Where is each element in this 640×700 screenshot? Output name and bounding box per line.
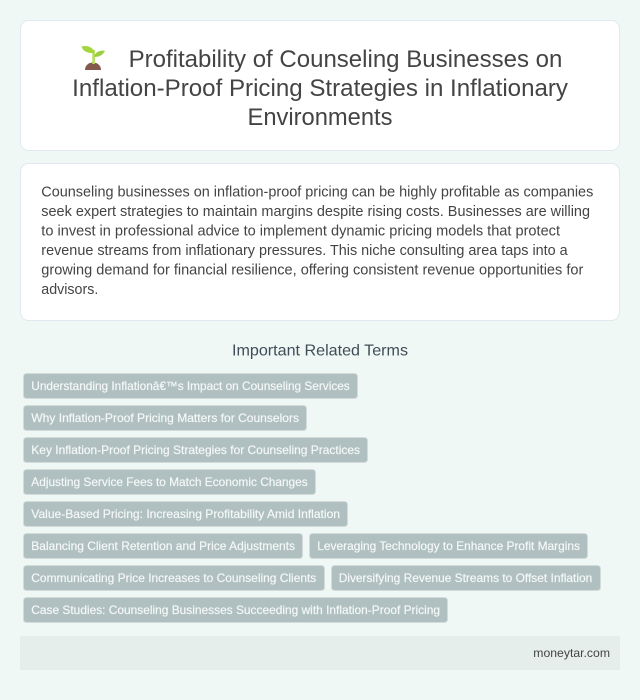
related terms tag list <box>24 374 600 622</box>
tag: balancing client retention: Balancing Client Retention and Price Adjustments <box>31 539 295 553</box>
tag: balancing client retention <box>24 534 302 558</box>
panel: summary paragraph: revenue streams from inflationary pressures. This niche consulting area taps into a <box>41 243 568 259</box>
panel: summary paragraph: Counseling businesses on inflation-proof pricing can be highly profitable as companies <box>41 185 593 201</box>
heading: title: Inflation-Proof Pricing Strategies in Inflationary <box>72 75 568 102</box>
tag: why pricing matters: Why Inflation-Proof Pricing Matters for Counselors <box>31 411 299 425</box>
tag: value-based pricing <box>24 502 348 526</box>
panel: summary paragraph: to invest in professional advice to implement dynamic pricing models that protect <box>41 224 560 240</box>
panel: summary paragraph: advisors. <box>41 282 98 298</box>
tag: communicating price increases <box>24 566 324 590</box>
footer: moneytar.com <box>533 646 610 660</box>
heading: title: Profitability of Counseling Businesses on <box>129 46 562 73</box>
heading: important related terms: Important Related Terms <box>232 342 408 360</box>
icon: seedling <box>82 46 105 70</box>
tag: why pricing matters <box>24 406 306 430</box>
tag: case studies: Case Studies: Counseling Businesses Succeeding with Inflation-Proof Pricing <box>31 603 440 617</box>
tag: case studies <box>24 598 448 622</box>
footer <box>20 636 620 670</box>
tag: key strategies <box>24 438 368 462</box>
tag: understanding inflation <box>24 374 358 398</box>
tag: leveraging technology <box>310 534 588 558</box>
heading: title <box>72 46 568 131</box>
panel: title card <box>20 20 620 150</box>
tag: communicating price increases: Communicating Price Increases to Counseling Clients <box>31 571 316 585</box>
panel: summary paragraph: growing demand for financial resilience, offering consistent revenue opportunities for <box>41 263 584 279</box>
tag: adjusting service fees: Adjusting Service Fees to Match Economic Changes <box>31 475 308 489</box>
tag: leveraging technology: Leveraging Technology to Enhance Profit Margins <box>317 539 580 553</box>
tag: adjusting service fees <box>24 470 316 494</box>
tag: understanding inflation: Understanding Inflationâ€™s Impact on Counseling Services <box>31 379 350 393</box>
tag: key strategies: Key Inflation-Proof Pricing Strategies for Counseling Practices <box>31 443 360 457</box>
tag: diversifying revenue <box>332 566 600 590</box>
tag: value-based pricing: Value-Based Pricing: Increasing Profitability Amid Inflation <box>31 507 340 521</box>
panel: summary paragraph: seek expert strategies to maintain margins despite rising costs. Businesses are willing <box>41 204 590 220</box>
tag: diversifying revenue: Diversifying Revenue Streams to Offset Inflation <box>339 571 592 585</box>
heading: title: Environments <box>248 104 392 131</box>
panel: summary paragraph <box>20 164 620 320</box>
